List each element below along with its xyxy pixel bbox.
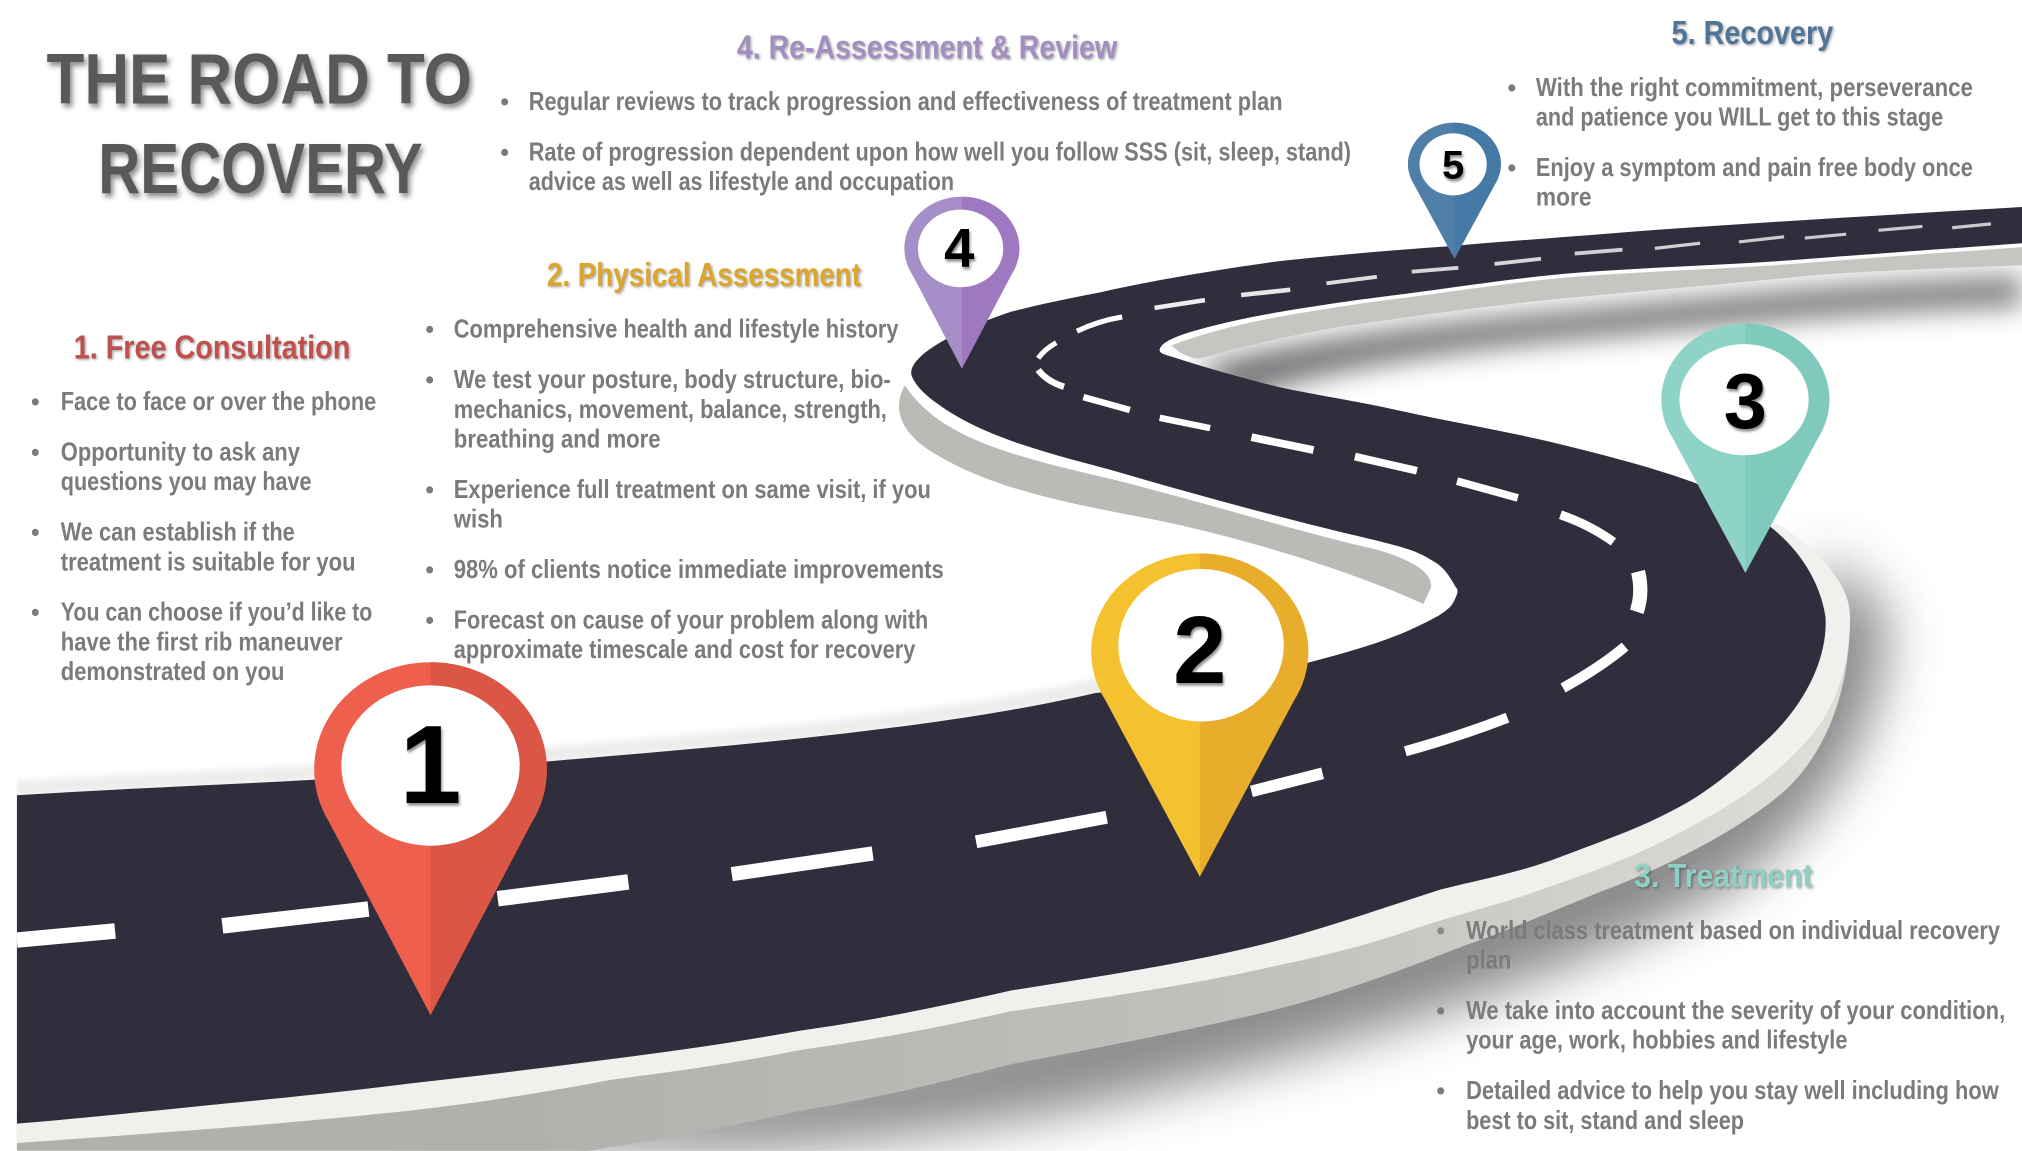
list: treatment points: • bbox=[1436, 918, 1445, 945]
list: consultation points: You can choose if you’d like to bbox=[61, 599, 372, 627]
icon: map pin 5 bbox=[1408, 123, 1501, 259]
heading: 1. Free Consultation: 1. Free Consultation bbox=[74, 329, 350, 366]
list: treatment points bbox=[1436, 917, 2005, 1135]
road centre dashes bbox=[17, 224, 1991, 940]
barrier: lower white lip bbox=[17, 524, 1850, 1143]
icon: map pin 1: 1 bbox=[400, 702, 461, 827]
list: treatment points: • bbox=[1436, 1078, 1445, 1105]
list: assessment points bbox=[425, 316, 944, 664]
icon: map pin 2 bbox=[1091, 553, 1308, 877]
list: assessment points: Forecast on cause of your problem along with bbox=[454, 607, 928, 635]
panel: 3. Treatment bbox=[1436, 858, 2005, 1135]
list: review points: Regular reviews to track progression and effectiveness of treatment plan bbox=[529, 88, 1282, 116]
list: treatment points: • bbox=[1436, 998, 1445, 1025]
icon: map pin 4: 4 bbox=[944, 218, 974, 279]
list: assessment points: • bbox=[425, 557, 434, 584]
heading: 4. Re-Assessment & Review: 4. Re-Assessment & Review bbox=[737, 29, 1118, 66]
list: recovery points: more bbox=[1536, 184, 1591, 212]
list: assessment points: 98% of clients notice immediate improvements bbox=[454, 556, 944, 584]
list: assessment points: • bbox=[425, 317, 434, 344]
title: THE ROAD TO bbox=[47, 41, 472, 120]
list: review points: • bbox=[500, 139, 509, 166]
road shadow: lower curve bbox=[388, 550, 1886, 1151]
list: recovery points: • bbox=[1507, 155, 1516, 182]
barrier: hairpin grey wall bbox=[899, 385, 1431, 604]
list: consultation points: • bbox=[31, 600, 40, 627]
list: treatment points: your age, work, hobbies and lifestyle bbox=[1466, 1027, 1847, 1055]
list: assessment points: Experience full treatment on same visit, if you bbox=[454, 476, 931, 504]
list: treatment points: best to sit, stand and sleep bbox=[1466, 1107, 1744, 1135]
list: consultation points: questions you may have bbox=[61, 468, 312, 496]
title bbox=[47, 41, 472, 209]
list: review points bbox=[500, 88, 1351, 196]
list: treatment points: plan bbox=[1466, 947, 1511, 975]
icon: map pin 2: 2 bbox=[1173, 597, 1226, 704]
panel: 4. Re-Assessment & Review bbox=[500, 29, 1351, 196]
icon: map pin 4 bbox=[904, 197, 1019, 369]
list: review points: Rate of progression dependent upon how well you follow SSS (sit, sleep, stand) bbox=[529, 138, 1351, 166]
list: recovery points: and patience you WILL get to this stage bbox=[1536, 104, 1943, 132]
list: consultation points: treatment is suitable for you bbox=[61, 548, 356, 576]
list: recovery points: • bbox=[1507, 75, 1516, 102]
list: consultation points: demonstrated on you bbox=[61, 658, 284, 686]
list: consultation points: • bbox=[31, 389, 40, 416]
list: assessment points: approximate timescale and cost for recovery bbox=[454, 636, 916, 664]
list: assessment points: We test your posture, body structure, bio- bbox=[454, 366, 891, 394]
list: consultation points bbox=[31, 388, 376, 686]
list: assessment points: • bbox=[425, 367, 434, 394]
list: assessment points: • bbox=[425, 608, 434, 635]
list: assessment points: • bbox=[425, 477, 434, 504]
road shadow: upper straight bbox=[1196, 277, 2022, 401]
list: assessment points: Comprehensive health and lifestyle history bbox=[454, 316, 899, 344]
list: review points: • bbox=[500, 89, 509, 116]
list: assessment points: breathing and more bbox=[454, 426, 661, 454]
title: RECOVERY bbox=[98, 130, 423, 209]
list: consultation points: • bbox=[31, 520, 40, 547]
list: assessment points: wish bbox=[453, 506, 503, 534]
panel: 5. Recovery bbox=[1507, 15, 1973, 212]
road surface bbox=[17, 207, 2022, 1124]
heading: 5. Recovery: 5. Recovery bbox=[1672, 15, 1834, 52]
heading: 3. Treatment: 3. Treatment bbox=[1634, 858, 1813, 895]
road shoulder above main carriageway bbox=[17, 674, 1202, 789]
list: assessment points: mechanics, movement, balance, strength, bbox=[454, 396, 887, 424]
icon: map pin 3: 3 bbox=[1724, 359, 1767, 445]
barrier: lower outer grey wall bbox=[17, 524, 1850, 1151]
panel: 2. Physical Assessment bbox=[425, 257, 944, 664]
icon: map pin 1 bbox=[314, 662, 547, 1015]
panel: 1. Free Consultation bbox=[31, 329, 376, 686]
list: consultation points: • bbox=[31, 439, 40, 466]
list: consultation points: Opportunity to ask any bbox=[61, 438, 300, 466]
list: consultation points: Face to face or over the phone bbox=[61, 388, 376, 416]
heading: 2. Physical Assessment: 2. Physical Assessment bbox=[547, 257, 861, 294]
list: consultation points: have the first rib maneuver bbox=[61, 628, 343, 656]
icon: map pin 3 bbox=[1661, 323, 1829, 573]
list: consultation points: We can establish if the bbox=[61, 519, 295, 547]
list: review points: advice as well as lifestyle and occupation bbox=[529, 168, 954, 196]
barrier: upper grey wall bbox=[1171, 247, 2022, 359]
icon: map pin 5: 5 bbox=[1442, 144, 1464, 188]
list: recovery points bbox=[1507, 74, 1973, 212]
